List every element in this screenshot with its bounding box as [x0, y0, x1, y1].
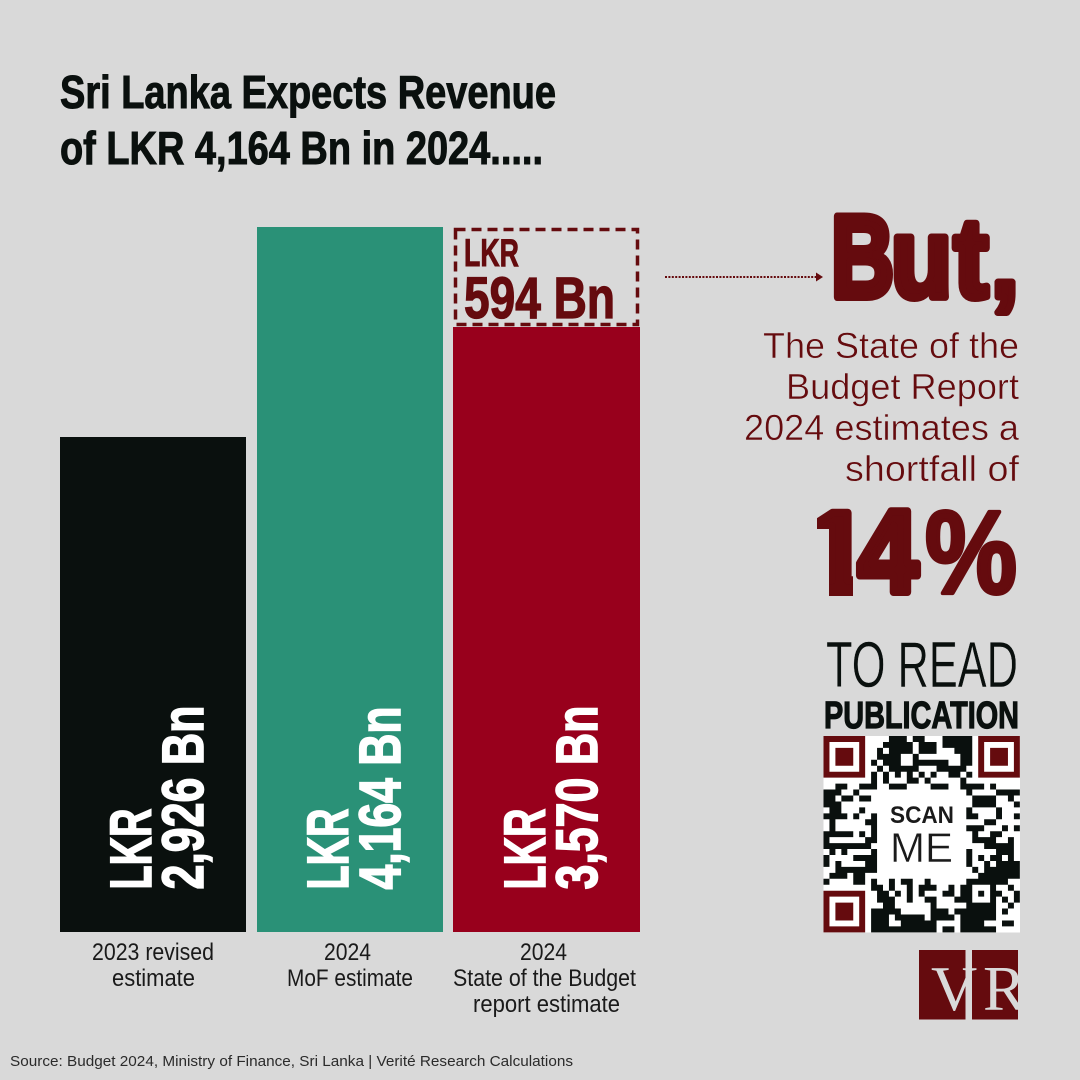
big number: 14%: 4	[858, 486, 918, 617]
axis label: 2024 State of the Budget report estimate: report estimate	[473, 991, 620, 1018]
bar: 2023 revised estimate	[60, 437, 246, 932]
bar: 2024 State of the Budget estimate	[453, 327, 640, 932]
axis label: 2024 MoF estimate: 2024	[324, 939, 371, 966]
heading: But,: u	[891, 196, 952, 321]
logo: VR: V	[931, 953, 977, 1024]
bar: 2024 MoF estimate: LKR	[296, 808, 361, 890]
text block: shortfall explanation: The State of the	[763, 325, 1019, 366]
logo: VR: R	[983, 953, 1026, 1024]
axis label: 2024 State of the Budget report estimate	[453, 939, 636, 1018]
text block: shortfall explanation: Budget Report	[786, 366, 1019, 407]
axis label: 2023 revised estimate	[92, 939, 214, 992]
axis label: 2023 revised estimate: 2023 revised	[92, 939, 214, 966]
heading: But,: t	[954, 196, 988, 321]
text block: shortfall explanation	[744, 325, 1020, 489]
bar: 2024 State of the Budget estimate: 3,570 Bn	[545, 706, 610, 890]
bar: 2024 MoF estimate: 4,164 Bn	[348, 706, 413, 890]
bar: 2023 revised estimate: LKR	[99, 808, 164, 890]
bar: 2024 MoF estimate	[257, 227, 443, 932]
QR code	[824, 736, 1020, 932]
arrow: dotted to But	[665, 272, 823, 282]
axis label: 2024 MoF estimate	[287, 939, 413, 992]
big number: 14%: 1	[805, 489, 869, 617]
QR code: ME	[890, 824, 953, 871]
text: publication: PUBLICATION	[824, 695, 1019, 737]
dashed shortfall box: LKR	[464, 232, 519, 275]
axis label: 2024 MoF estimate: MoF estimate	[287, 965, 413, 992]
axis label: 2023 revised estimate: estimate	[112, 965, 195, 992]
title: of LKR 4,164 Bn in 2024.....	[60, 122, 543, 174]
big number: 14%: %	[925, 487, 1017, 619]
axis label: 2024 State of the Budget report estimate: 2024	[520, 939, 567, 966]
axis label: 2024 State of the Budget report estimate: State of the Budget	[453, 965, 636, 992]
dashed shortfall box: 594 Bn	[464, 266, 615, 331]
text block: shortfall explanation: shortfall of	[845, 448, 1020, 489]
bar: 2023 revised estimate: 2,926 Bn	[151, 706, 216, 890]
logo: VR	[919, 950, 1018, 1020]
text block: shortfall explanation: 2024 estimates a	[744, 407, 1020, 448]
big number: 14%	[800, 486, 1017, 619]
source note: Source: Budget 2024, Ministry of Finance, Sri Lanka | Verité Research Calculations	[10, 1054, 573, 1070]
heading: But,: ,	[991, 207, 1019, 319]
heading: But,	[831, 191, 1019, 322]
title: Sri Lanka Expects Revenue	[60, 66, 556, 118]
heading: But,: B	[831, 191, 894, 322]
title	[60, 66, 556, 174]
QR code: SCAN	[890, 802, 954, 829]
dashed shortfall box	[456, 230, 638, 331]
bar: 2024 State of the Budget estimate: LKR	[493, 808, 558, 890]
